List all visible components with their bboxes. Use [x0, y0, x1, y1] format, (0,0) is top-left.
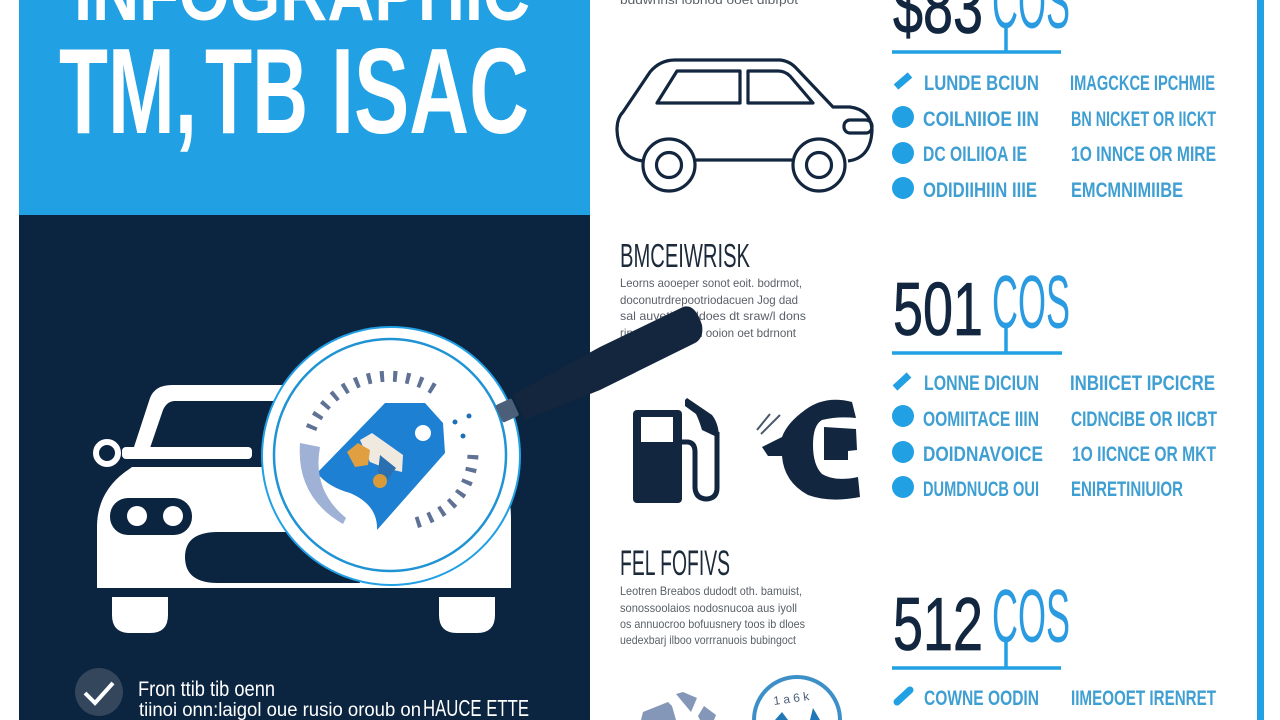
stat block: middle — [892, 260, 1217, 501]
heading: section three: FEL FOFIVS — [620, 544, 730, 583]
text block: section two: Leorns aooeper sonot eoit. bodrmot, — [620, 276, 802, 290]
stat list: top: BN NICKET OR IICKT — [1071, 108, 1216, 131]
icon: fuel pump — [633, 398, 719, 503]
stat list: top: IMAGCKCE IPCHMIE — [1070, 72, 1215, 95]
text block: section three: uedexbarj ilboo vorrranuois bubingoct — [620, 633, 797, 647]
stat list: bottom — [897, 687, 1216, 710]
stat list: middle: 1O IICNCE OR MKT — [1072, 443, 1216, 466]
icon: check badge — [75, 668, 123, 716]
right page border — [1257, 0, 1264, 720]
stat list: top: COILNIIOE IIN — [923, 108, 1039, 131]
stat list: middle — [892, 372, 1217, 501]
stat list: middle: LONNE DICIUN — [924, 372, 1039, 395]
stat list: middle: DOIDNAVOICE — [923, 443, 1043, 466]
stat list: bottom: COWNE OODIN — [924, 687, 1039, 710]
text block: section two: rinstnnes nonon ooion oet bdrnont — [620, 326, 797, 340]
footer text — [138, 678, 529, 720]
stat list: middle: CIDNCIBE OR IICBT — [1071, 408, 1217, 431]
stat list: middle: OOMIITACE IIIN — [923, 408, 1039, 431]
title: ISAC — [331, 23, 529, 159]
icon: side view car outline — [617, 60, 872, 191]
stat list: top: EMCMNIMIIBE — [1071, 179, 1183, 202]
icon: circular badge: 1a6k — [772, 689, 811, 708]
text block: section three: sonossoolaios nodosnucoa aus iyoll — [620, 601, 797, 615]
stat list: middle: INBIICET IPCICRE — [1070, 372, 1215, 395]
stat list: middle: ENIRETINIUIOR — [1071, 478, 1183, 501]
title — [59, 0, 530, 159]
text block: section three: os annuocroo bofuusnery toos ib dloes — [620, 617, 805, 631]
stat block: middle: 501 — [893, 267, 983, 351]
icon: magnifying glass handle — [512, 306, 702, 420]
text block: section three — [620, 584, 805, 647]
panel: blue title header — [19, 0, 590, 215]
text block: section three: Leotren Breabos dudodt oth. bamuist, — [620, 584, 802, 598]
title: TM, — [59, 23, 197, 159]
illustration: front view car — [96, 385, 511, 633]
stat block: bottom: COS — [992, 574, 1070, 658]
icon: handle collar — [495, 398, 519, 423]
stat list: top: 1O INNCE OR MIRE — [1071, 143, 1216, 166]
stat block: bottom — [892, 574, 1216, 710]
icon: handshake fragment — [641, 692, 716, 720]
stat block: top — [892, 0, 1216, 202]
stat list: bottom: IIMEOOET IRENRET — [1071, 687, 1216, 710]
stat list: top: LUNDE BCIUN — [924, 72, 1039, 95]
icon: currency symbol — [757, 400, 860, 500]
icon: circular badge — [754, 677, 840, 720]
stat block: bottom: 512 — [893, 582, 983, 666]
heading: section two: BMCEIWRISK — [620, 237, 750, 274]
icon: magnifying glass lens with price tag — [262, 327, 520, 585]
panel: dark navy — [19, 215, 590, 720]
stat list: middle: DUMDNUCB OUI — [923, 478, 1039, 501]
text block: section two: doconutrdrepootriodacuen Jog dad — [620, 293, 798, 307]
text block: section two: sal auvetions ldoes dt sraw/l dons — [620, 309, 806, 323]
footer text: Fron ttib tib oenn — [138, 678, 275, 701]
stat block: middle: COS — [992, 260, 1070, 344]
text block: section two — [620, 276, 806, 340]
title: TB — [205, 23, 308, 159]
stat list: top — [892, 72, 1216, 202]
stat list: top: ODIDIIHIIN IIIE — [923, 179, 1037, 202]
stat list: top: DC OILIIOA IE — [923, 143, 1027, 166]
